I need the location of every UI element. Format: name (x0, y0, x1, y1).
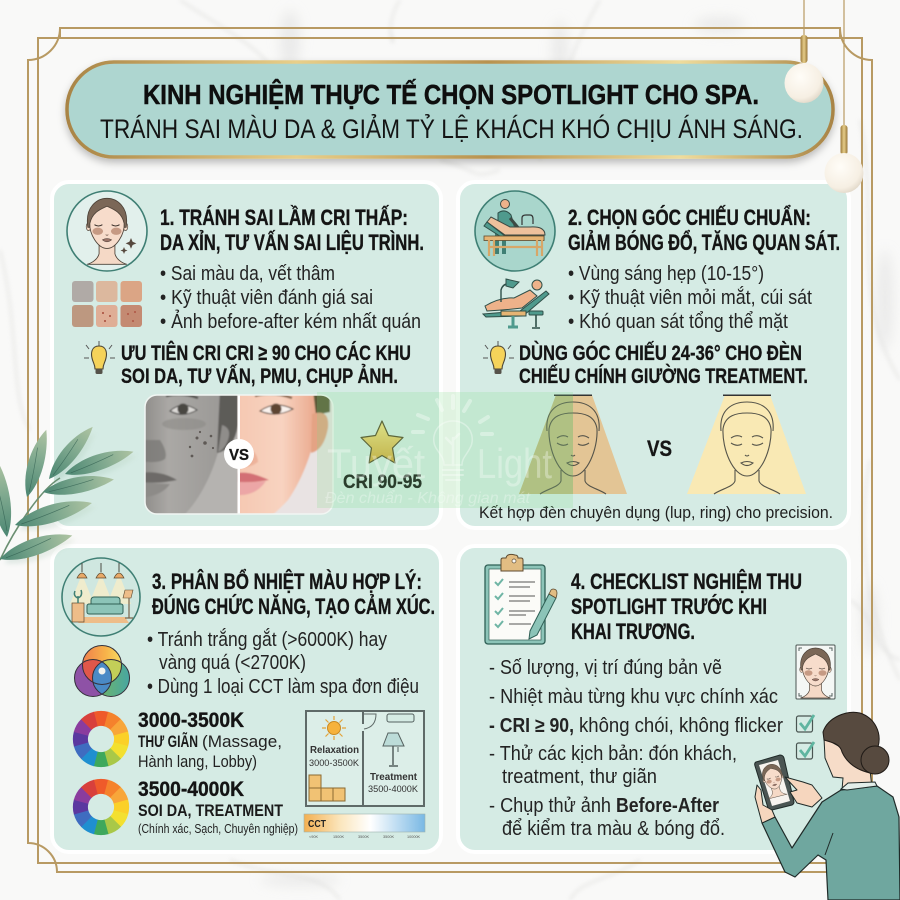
neutral temperature text: 3500-4000K (138, 778, 244, 801)
panel 3 bullets: • Tránh trắng gắt (>6000K) hay (147, 628, 387, 651)
panel 4 heading: 4. CHECKLIST NGHIỆM THU (571, 569, 802, 594)
warm temperature text: Hành lang, Lobby) (138, 753, 257, 771)
portrait frame (796, 645, 835, 699)
warm temperature text: THƯ GIÃN (138, 731, 198, 751)
watermark wordmark: Tuyết (327, 440, 425, 487)
title line 1: KINH NGHIỆM THỰC TẾ CHỌN SPOTLIGHT CHO SPA. (143, 79, 759, 110)
warm temperature text: (Massage, (202, 733, 282, 751)
neck and face (824, 738, 872, 790)
panel 1 heading (160, 205, 424, 255)
diagram: wide beam on face (687, 394, 806, 494)
panel 1 bullets: • Kỹ thuật viên đánh giá sai (160, 287, 373, 309)
icon: therapist at treatment bed (475, 191, 555, 271)
panel 1 bullets: • Ảnh before-after kém nhất quán (160, 310, 421, 333)
panel 1 heading: 1. TRÁNH SAI LẦM CRI THẤP: (160, 205, 408, 230)
checklist items: - Chụp thử ảnh (489, 795, 611, 817)
CCT scale: 3500K (358, 835, 369, 839)
colour wheel 1 (73, 711, 129, 767)
panel 1 bullets: • Sai màu da, vết thâm (160, 263, 335, 285)
icon: client on reclining chair with lamp (483, 279, 549, 328)
VS badge: VS (229, 447, 249, 464)
hanging lamps (784, 0, 864, 193)
checklist items: - Số lượng, vị trí đúng bản vẽ (489, 657, 722, 679)
floor plan: 3500-4000K (368, 784, 419, 795)
panel 2 heading (568, 205, 840, 255)
panel 2 bullets: • Kỹ thuật viên mỏi mắt, cúi sát (568, 286, 812, 309)
icon: clipboard with pencil (485, 554, 557, 644)
panel 2: beam angle (458, 182, 849, 528)
checklist items (489, 657, 783, 840)
beam angle callout (519, 340, 808, 388)
CCT scale: 10000K (407, 835, 421, 839)
floor plan (306, 711, 424, 806)
icon: light bulb (84, 341, 115, 374)
CCT scale: 3500K (383, 835, 394, 839)
leaf branch (0, 422, 140, 570)
watermark bulb (413, 396, 492, 480)
jacket (762, 786, 900, 900)
sun icon (322, 716, 346, 740)
panel 1: CRI (52, 182, 441, 528)
note: Kết hợp đèn chuyên dụng (lup, ring) cho precision. (479, 503, 833, 522)
checklist items: - CRI ≥ 90, (489, 715, 574, 737)
priority callout: SOI DA, TƯ VẤN, PMU, CHỤP ẢNH. (121, 363, 398, 388)
phone (755, 755, 794, 810)
panel 4 heading: SPOTLIGHT TRƯỚC KHI (571, 594, 767, 619)
watermark tagline: Đèn chuẩn - Không gian mát (325, 489, 531, 507)
before-after photo comparison (144, 394, 334, 515)
collar (841, 782, 877, 790)
VS badge (224, 439, 254, 469)
floor plan: Relaxation (310, 745, 359, 756)
CCT scale: 1500K (333, 835, 344, 839)
checklist items: - Nhiệt màu từng khu vực chính xác (489, 686, 778, 708)
checklist items: - Thử các kịch bản: đón khách, (489, 743, 737, 765)
floor plan: 3000-3500K (309, 758, 360, 769)
panel 2 heading: 2. CHỌN GÓC CHIẾU CHUẨN: (568, 205, 811, 230)
panel 4 heading (571, 569, 802, 644)
checklist items: Before-After (616, 795, 719, 817)
panel 3: colour temperature (52, 546, 441, 852)
checklist items: không chói, không flicker (579, 715, 783, 737)
priority callout: ƯU TIÊN CRI CRI ≥ 90 CHO CÁC KHU (121, 340, 411, 365)
beam angle callout: CHIẾU CHÍNH GIƯỜNG TREATMENT. (519, 363, 808, 388)
panel 3 bullets: • Dùng 1 loại CCT làm spa đơn điệu (147, 676, 419, 698)
panel 2 bullets: • Khó quan sát tổng thể mặt (568, 311, 788, 333)
panel 1 heading: DA XỈN, TƯ VẤN SAI LIỆU TRÌNH. (160, 230, 424, 255)
hands (755, 777, 822, 823)
panel 3 bullets (147, 628, 419, 698)
panel 3 bullets: vàng quá (<2700K) (159, 652, 306, 674)
icon: lounge with pendant lights (62, 558, 140, 636)
floor lamp (383, 733, 404, 766)
icon: face with skin marks (67, 191, 147, 271)
warm temperature text: 3000-3500K (138, 709, 244, 732)
panel 2 bullets (568, 263, 812, 333)
icon: light bulb (483, 341, 514, 374)
header banner (67, 62, 833, 157)
icon: star (361, 421, 403, 463)
checklist items: để kiểm tra màu & bóng đổ. (502, 818, 725, 840)
panel 4: checklist (458, 546, 849, 852)
air conditioner (387, 714, 414, 722)
checkboxes (796, 715, 814, 759)
warm temperature text (138, 709, 282, 771)
panel 2 bullets: • Vùng sáng hẹp (10-15°) (568, 263, 764, 285)
CCT scale: <90K (309, 835, 318, 839)
neutral temperature text: (Chính xác, Sạch, Chuyên nghiệp) (138, 821, 298, 836)
skin tone swatches (72, 281, 142, 327)
hair (823, 712, 879, 773)
CRI label: CRI 90-95 (343, 471, 422, 493)
panel 3 heading: 3. PHÂN BỔ NHIỆT MÀU HỢP LÝ: (152, 569, 422, 594)
panel 3 heading: ĐÚNG CHỨC NĂNG, TẠO CẢM XÚC. (152, 594, 435, 619)
checklist items: treatment, thư giãn (502, 766, 657, 788)
panel 4 heading: KHAI TRƯƠNG. (571, 619, 695, 644)
panel 3 heading (152, 569, 435, 619)
neutral temperature text (138, 778, 298, 836)
sofa icon (309, 775, 345, 801)
priority callout (121, 340, 411, 388)
panel 1 bullets (160, 263, 421, 333)
floor plan: Treatment (370, 772, 418, 783)
watermark wordmark: Light (477, 440, 552, 487)
CCT scale (304, 814, 425, 839)
icon: RGB venn circles (74, 646, 130, 696)
diagram: narrow beam on face (519, 394, 627, 494)
CCT scale: CCT (308, 818, 326, 830)
colour wheel 2 (73, 779, 129, 835)
hair bun (861, 746, 889, 774)
VS label: VS (647, 436, 672, 461)
woman holding phone (755, 712, 900, 900)
beam angle callout: DÙNG GÓC CHIẾU 24-36° CHO ĐÈN (519, 340, 802, 365)
watermark: Tuyết Light (317, 392, 573, 508)
neutral temperature text: SOI DA, TREATMENT (138, 801, 284, 820)
